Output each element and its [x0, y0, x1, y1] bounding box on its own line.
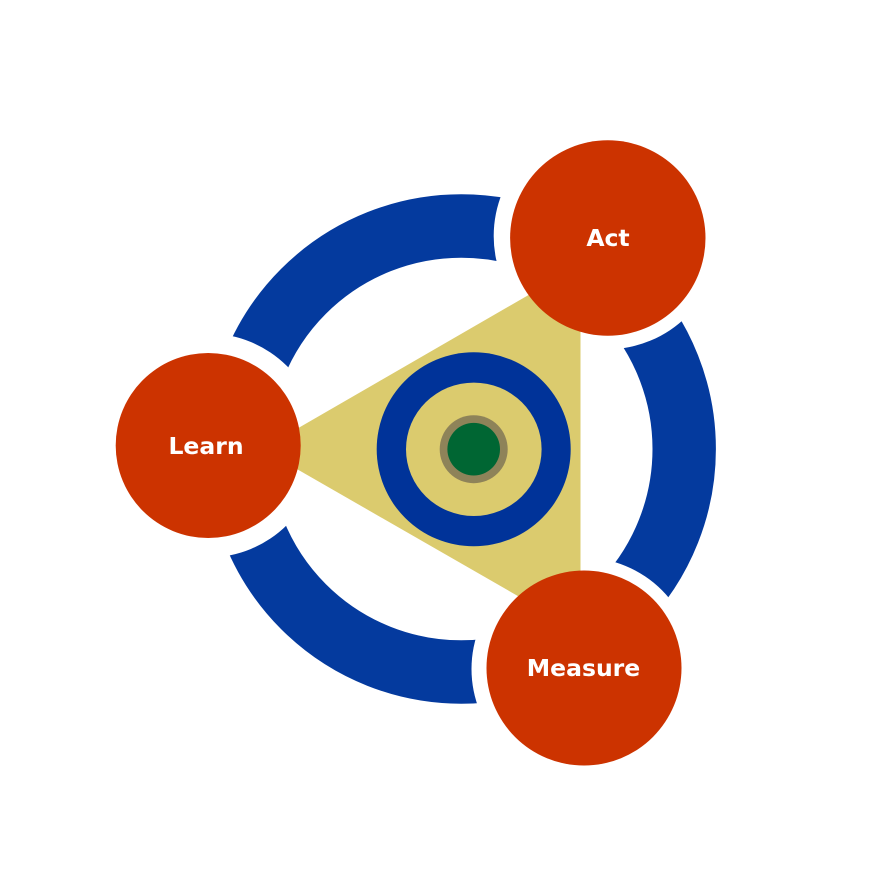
gold triangle [262, 265, 580, 632]
node: Learn [116, 353, 301, 538]
white halos separating ring segments [96, 123, 720, 780]
center target [377, 352, 571, 546]
node: Measure: Measure [527, 654, 640, 682]
blue cycle ring [238, 226, 684, 672]
node: Act [510, 140, 706, 336]
node: Act: Act [586, 224, 630, 252]
node: Learn: Learn [168, 432, 244, 460]
node: Measure [486, 570, 682, 766]
